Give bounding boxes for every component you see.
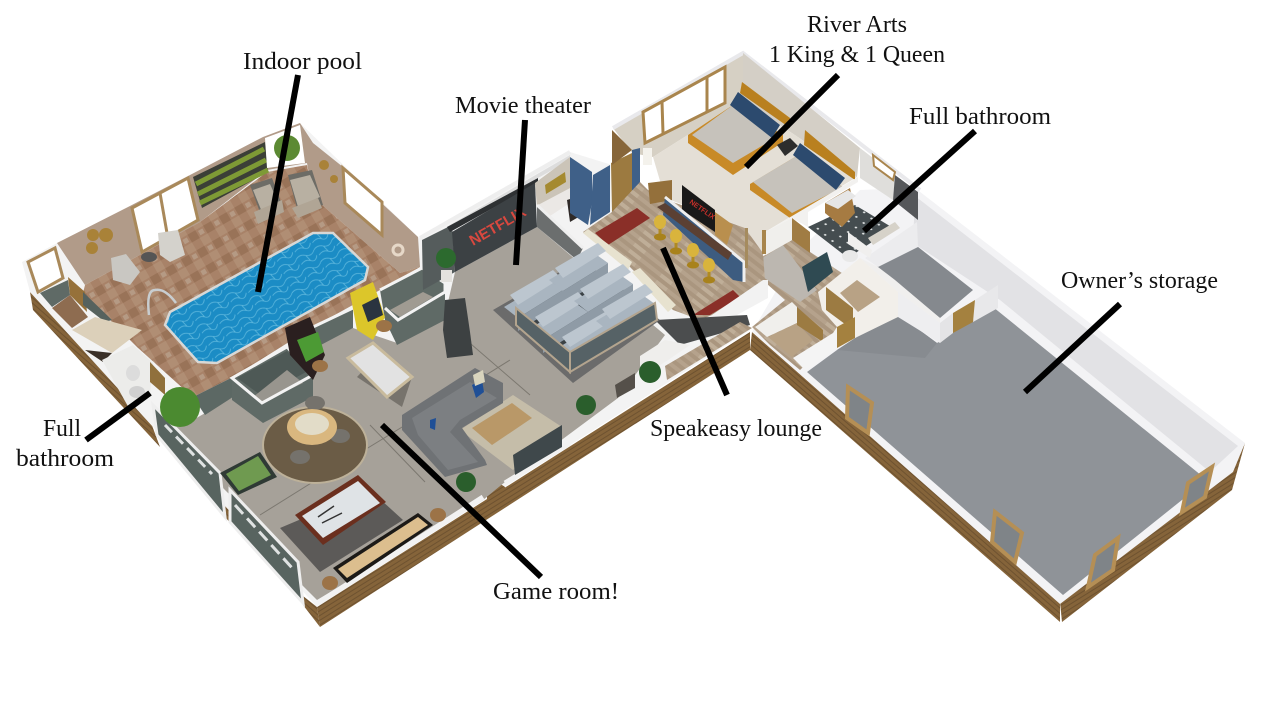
wall rim	[313, 308, 353, 327]
teal sofa	[802, 252, 833, 292]
partition short	[940, 313, 953, 343]
stool 1	[312, 360, 328, 372]
label: indoor pool: Indoor pool	[243, 49, 362, 75]
plant fireplace	[639, 361, 661, 383]
queen pillows	[793, 143, 845, 190]
king mattress	[692, 105, 777, 163]
gold sign	[545, 172, 566, 194]
coffee table	[472, 403, 532, 445]
ottoman	[254, 200, 284, 224]
panel: game room floor	[153, 227, 665, 603]
seats	[504, 243, 655, 373]
front rail left	[516, 308, 570, 372]
seat 6	[596, 284, 655, 345]
window 3	[1088, 538, 1118, 587]
stools at arcades	[312, 320, 392, 372]
landing floor	[52, 295, 88, 328]
wine fridge	[567, 195, 582, 222]
bath door	[150, 362, 165, 395]
tile floor	[83, 165, 420, 397]
hall rug	[748, 245, 817, 302]
closet door C	[837, 317, 855, 348]
screen	[297, 332, 324, 362]
toilet	[126, 365, 140, 381]
plate 3	[86, 242, 98, 254]
post	[745, 228, 748, 268]
panel: speakeasy lounge	[583, 180, 768, 380]
bar rim	[665, 197, 744, 282]
glass door	[648, 180, 672, 204]
bath back wall	[860, 148, 895, 200]
blue wall 1	[570, 157, 592, 225]
cream pillow	[473, 370, 485, 386]
dark wall	[422, 225, 455, 290]
wall plates left	[86, 228, 113, 254]
small window	[873, 155, 895, 180]
box rim	[380, 268, 445, 320]
felt	[302, 481, 380, 538]
panel: owner's storage wing	[750, 188, 1245, 622]
vanity top	[825, 190, 856, 209]
closet box, center	[232, 347, 313, 423]
air hockey table	[348, 343, 412, 407]
grey back wall	[40, 280, 70, 307]
left siding	[30, 292, 160, 447]
queen bed	[750, 130, 855, 218]
left wall part 2	[230, 490, 303, 603]
nightstand	[777, 138, 798, 156]
floor tile seams	[260, 300, 540, 515]
shower tile wall	[893, 175, 918, 220]
leader line: river arts	[746, 75, 838, 167]
shuffleboard stools	[322, 508, 446, 590]
bath walls	[102, 345, 153, 410]
box inner back	[237, 351, 306, 396]
stool 2	[376, 320, 392, 332]
tv panel	[682, 185, 715, 232]
tree	[274, 135, 300, 161]
stairs	[72, 317, 142, 353]
plate 1	[87, 229, 99, 241]
label: river arts: River Arts	[807, 12, 907, 38]
stair opening	[85, 350, 112, 362]
screen	[362, 297, 383, 322]
closet door B	[797, 307, 823, 342]
label: owner's storage: Owner’s storage	[1061, 268, 1218, 294]
plate 4	[319, 160, 329, 170]
window wall	[613, 53, 743, 157]
left wall part 1	[153, 405, 225, 517]
card table and rug	[263, 396, 367, 483]
leaves	[436, 248, 456, 268]
wall windows 1	[165, 425, 212, 474]
armchair left	[111, 254, 140, 285]
counter	[538, 187, 582, 216]
chair base	[250, 178, 282, 218]
toilet	[842, 250, 858, 262]
closet B walls	[755, 302, 797, 337]
tile floor	[808, 205, 893, 258]
bar nook	[535, 130, 652, 225]
bar partition	[663, 197, 745, 282]
wall windows 2	[235, 505, 294, 570]
window 4	[1182, 467, 1212, 512]
tv console	[513, 425, 562, 475]
field	[226, 456, 271, 491]
lane	[338, 517, 428, 578]
armchair back right	[288, 170, 323, 212]
arcade machine yellow	[350, 282, 385, 340]
wood floor	[583, 182, 765, 320]
armchair middle	[158, 230, 185, 262]
bedroom floor	[653, 100, 857, 253]
stool left	[322, 576, 338, 590]
plant left	[160, 387, 200, 427]
cream bench 2	[632, 268, 676, 312]
leader line: owner's storage	[1025, 304, 1120, 392]
recliner-side sofa	[402, 368, 562, 477]
end wall	[973, 285, 998, 322]
leader line: movie theater	[516, 120, 525, 265]
wall rim	[420, 152, 570, 238]
round rug	[263, 407, 367, 483]
projection screen	[452, 183, 537, 272]
word: bathroom: bathroom	[16, 446, 114, 472]
label: game room: Game room!	[493, 579, 619, 605]
chair seat	[290, 175, 320, 207]
mullion	[160, 193, 167, 233]
label: movie theater: Movie theater	[455, 93, 591, 119]
panel: closets and hall	[748, 240, 898, 371]
chair seat	[253, 184, 278, 212]
cue	[318, 506, 342, 523]
queen headboard	[804, 130, 855, 180]
pool room walls	[57, 123, 420, 285]
headboard wall	[743, 53, 860, 177]
seat 2	[549, 243, 608, 304]
panel: full bathroom, right	[765, 148, 918, 262]
seat 3	[529, 292, 588, 353]
queen mattress	[753, 157, 843, 213]
side patch siding	[222, 500, 238, 532]
table top	[295, 413, 329, 435]
king headboard	[740, 82, 790, 128]
pot	[441, 270, 452, 282]
king frame	[688, 105, 783, 175]
leader line: speakeasy lounge	[663, 248, 727, 395]
box outer	[380, 268, 445, 345]
corner siding	[303, 596, 320, 627]
box floor	[390, 292, 433, 317]
king pillows	[730, 92, 780, 138]
tv stand	[715, 212, 733, 245]
platform	[493, 260, 660, 383]
partition walls	[865, 222, 918, 267]
grey side wall	[83, 292, 112, 322]
stool 3	[687, 243, 699, 268]
closet B floor	[768, 323, 813, 357]
planter panel	[193, 142, 268, 208]
label: speakeasy lounge: Speakeasy lounge	[650, 416, 822, 442]
left window	[28, 248, 63, 292]
panel: left wing shell	[22, 123, 750, 627]
exterior siding, end	[1060, 443, 1245, 622]
table	[287, 409, 337, 445]
chair base	[288, 170, 323, 212]
front siding	[317, 332, 750, 627]
stairs	[655, 315, 750, 345]
platform inner	[515, 263, 653, 360]
box outer	[232, 347, 313, 423]
door	[68, 277, 87, 312]
low wall	[712, 280, 768, 327]
word: full: Full	[43, 416, 81, 442]
side table	[141, 252, 157, 262]
lower wall	[640, 340, 690, 378]
lower planks	[665, 322, 752, 380]
chair 3	[290, 450, 310, 464]
grey wall segment	[313, 308, 353, 347]
pool table	[280, 475, 403, 572]
plant sofa	[456, 472, 476, 492]
sofa rug	[460, 395, 562, 470]
seat 5	[556, 312, 615, 373]
fireplace	[615, 373, 635, 398]
box rim	[232, 347, 313, 403]
green wall	[193, 142, 268, 208]
window mullions	[662, 77, 707, 133]
label: full bathroom left	[16, 416, 114, 472]
wall rim	[613, 53, 920, 190]
armchair back left	[250, 178, 282, 218]
pool ladder	[148, 290, 176, 315]
planter rows	[196, 149, 268, 203]
chair 2	[330, 429, 350, 443]
low wall	[765, 218, 792, 255]
top	[348, 343, 412, 397]
plant front	[576, 395, 596, 415]
blue pillow 2	[430, 418, 436, 430]
siding stub	[612, 130, 632, 165]
closet box, right	[380, 268, 445, 345]
frame	[220, 452, 277, 495]
box floor	[253, 370, 303, 403]
large window	[132, 178, 198, 252]
frame	[333, 513, 433, 583]
seat 1	[504, 270, 563, 331]
netflix text: NETFLIX	[466, 203, 529, 249]
panel: River Arts bedroom	[613, 53, 920, 253]
king bed	[688, 82, 790, 175]
bath door	[792, 218, 810, 253]
window 2	[992, 512, 1022, 562]
back wall	[913, 196, 1238, 472]
stool 2	[670, 229, 682, 254]
cream bench 1	[583, 229, 632, 270]
vanity	[825, 188, 855, 227]
partition front	[898, 292, 940, 343]
front rail right	[570, 303, 657, 372]
floor shadow	[837, 312, 937, 358]
closet door A	[826, 287, 853, 330]
panel: indoor pool room	[28, 123, 420, 397]
foosball table	[220, 452, 277, 495]
white base	[22, 123, 750, 607]
shuffleboard	[333, 513, 433, 583]
sectional	[402, 368, 503, 477]
label: king and queen: 1 King & 1 Queen	[769, 42, 945, 68]
legs	[357, 360, 412, 407]
leader line: full bathroom left	[86, 393, 150, 440]
wall plates right	[319, 160, 338, 183]
plants	[160, 361, 661, 492]
leader line: full bathroom right	[864, 131, 975, 231]
queen frame	[750, 157, 843, 218]
panel: theater seating	[493, 205, 660, 383]
wood door	[611, 153, 632, 212]
seat 4	[574, 264, 633, 325]
chairs	[305, 396, 325, 410]
blue wall 2	[590, 165, 610, 225]
label: full bathroom right: Full bathroom	[909, 104, 1051, 130]
massage chair	[443, 298, 473, 358]
plate 2	[99, 228, 113, 242]
front wall rim	[318, 443, 570, 603]
stool 1	[654, 215, 666, 240]
right window	[343, 168, 382, 235]
carpet floor	[807, 307, 1207, 595]
partition rim	[765, 177, 858, 232]
grey fence	[193, 377, 233, 415]
projector bar	[447, 178, 538, 232]
stool right	[430, 508, 446, 522]
hall floor	[748, 240, 860, 370]
white shell	[752, 188, 1245, 604]
post 2	[762, 230, 766, 254]
concrete floor	[160, 227, 665, 600]
wall upper band	[447, 155, 570, 227]
arcade machine green	[285, 317, 325, 380]
seat cushions	[412, 382, 497, 470]
ottoman 2	[292, 198, 322, 218]
blue pillow	[472, 380, 484, 398]
life ring	[393, 245, 403, 255]
cabinet	[285, 317, 325, 380]
frame	[295, 475, 386, 545]
pool water	[165, 233, 368, 363]
plate 5	[330, 175, 338, 183]
gold stools	[654, 215, 715, 284]
partition inner face	[860, 258, 940, 323]
blue wall 3	[632, 148, 640, 200]
toilet wall	[848, 232, 872, 258]
closet A walls	[818, 258, 898, 338]
shower floor	[868, 222, 900, 245]
closet door	[953, 300, 975, 333]
partition wall	[537, 205, 583, 260]
panel: stairs and small bath, left	[40, 277, 165, 410]
window 1	[847, 387, 872, 433]
red rug 2	[693, 290, 740, 315]
plant by screen	[436, 248, 456, 282]
wood bulge	[487, 475, 505, 504]
red rug	[595, 208, 650, 245]
closet A floor	[840, 280, 880, 312]
cabinet	[350, 282, 385, 340]
tv logo: NETFLIX	[688, 199, 716, 222]
sink	[129, 386, 145, 398]
closet alcove floor	[877, 243, 973, 318]
leader line: indoor pool	[258, 75, 298, 292]
rug	[280, 490, 403, 572]
lamp	[643, 148, 652, 165]
leader line: game room	[382, 425, 541, 577]
windows	[643, 67, 725, 143]
back window gap	[265, 125, 305, 168]
exterior siding, storage wing	[750, 332, 1060, 622]
tv	[682, 185, 716, 232]
bar top	[657, 203, 732, 260]
closet front wall	[793, 327, 837, 371]
partition rim	[537, 205, 583, 248]
back wall	[535, 157, 570, 207]
movie theater wall	[420, 152, 570, 290]
stool 4	[703, 258, 715, 284]
